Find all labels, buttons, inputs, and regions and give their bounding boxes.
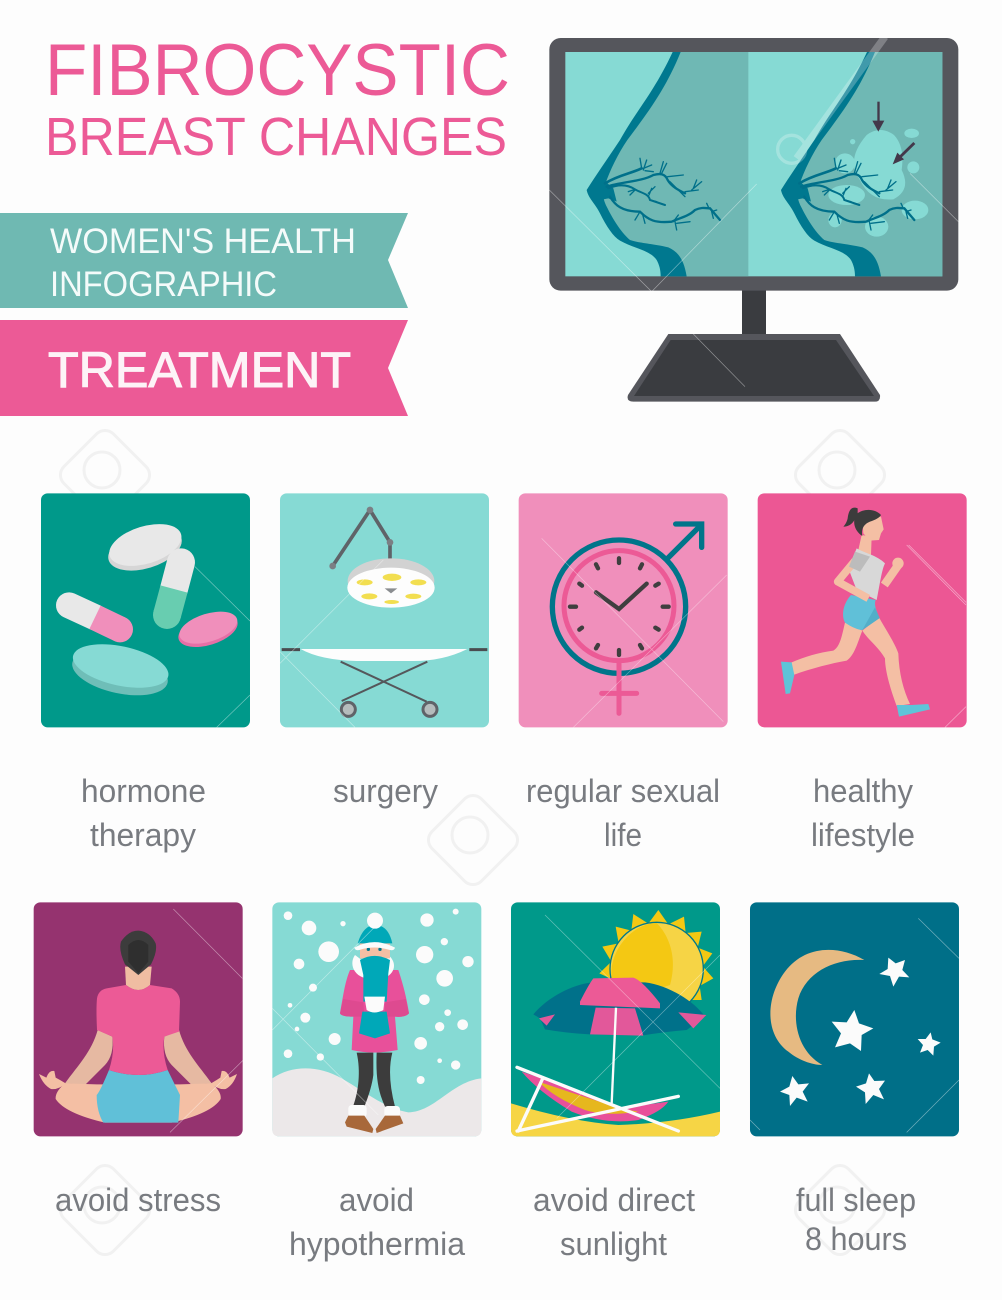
- icon: white tablet: [103, 516, 187, 579]
- icon: stars: [780, 958, 941, 1106]
- icon: runner: [781, 508, 930, 717]
- icon: meditating woman: [39, 931, 237, 1123]
- labels row 2: avoid: [339, 1182, 414, 1218]
- labels row 1: regular sexual: [526, 773, 720, 809]
- icon: white green capsule: [153, 562, 181, 629]
- title: FIBROCYSTIC: [45, 30, 510, 111]
- panel: hormone therapy: [41, 493, 250, 727]
- icon: deck chair: [517, 1067, 678, 1131]
- title: BREAST CHANGES: [45, 107, 507, 167]
- monitor frame: [549, 38, 958, 291]
- labels row 2: hypothermia: [289, 1226, 465, 1262]
- arrows pointing at cyst: [872, 102, 915, 164]
- icon: pink tablet: [174, 606, 242, 653]
- icon: woman in winter coat: [340, 913, 409, 1133]
- monitor stand: [628, 287, 880, 402]
- panel: surgery: [280, 493, 489, 727]
- labels row 1: hormone: [81, 773, 206, 809]
- icon: operating lamp: [329, 507, 435, 608]
- ribbon: women's health infographic: WOMEN'S HEALTH: [50, 222, 356, 261]
- icon: sun: [599, 910, 713, 1016]
- icon: snowflakes: [284, 909, 474, 1084]
- screen: breast with cysts: [748, 37, 942, 276]
- icon: teal tablet: [68, 637, 172, 703]
- labels row 2: full sleep: [796, 1182, 916, 1218]
- icon: male symbol: [552, 524, 702, 673]
- labels row 2: 8 hours: [805, 1221, 907, 1257]
- labels row 1: life: [604, 817, 642, 853]
- panel: full sleep 8 hours: [750, 902, 959, 1136]
- panel: avoid direct sunlight: [511, 902, 720, 1136]
- ribbon: women's health infographic: INFOGRAPHIC: [50, 265, 277, 304]
- labels row 1: therapy: [90, 817, 196, 853]
- cysts: [828, 129, 928, 237]
- snow ground: [272, 1068, 481, 1136]
- labels row 2: avoid stress: [55, 1182, 221, 1218]
- screen: normal breast: [565, 52, 748, 276]
- icon: female symbol: [564, 551, 674, 713]
- labels row 1: surgery: [333, 773, 438, 809]
- ribbon: treatment: TREATMENT: [48, 342, 351, 398]
- panel: avoid hypothermia: [272, 902, 481, 1136]
- labels row 1: [81, 773, 915, 853]
- icon: stretcher: [282, 649, 487, 716]
- title: [45, 30, 510, 167]
- panel: regular sexual life: [519, 493, 728, 727]
- ribbon: treatment: [0, 320, 408, 416]
- panel: healthy lifestyle: [758, 493, 967, 727]
- labels row 2: [55, 1182, 916, 1262]
- icon: white pink capsule: [69, 605, 133, 642]
- monitor with breast illustrations: [549, 37, 958, 402]
- labels row 1: healthy: [813, 773, 913, 809]
- panel: avoid stress: [34, 902, 245, 1136]
- icon: beach umbrella: [533, 978, 706, 1103]
- labels row 2: sunlight: [560, 1226, 667, 1262]
- icon: crescent moon: [770, 950, 864, 1065]
- labels row 1: lifestyle: [811, 817, 915, 853]
- labels row 2: avoid direct: [533, 1182, 695, 1218]
- icon: clock: [570, 558, 669, 655]
- ribbon: women's health infographic: [0, 213, 408, 308]
- sand: [511, 1103, 720, 1136]
